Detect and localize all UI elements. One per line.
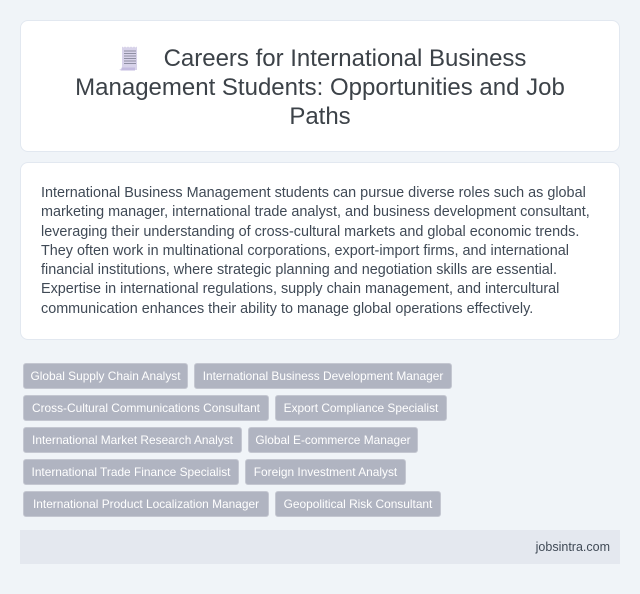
- tag: [194, 363, 452, 389]
- tag: [248, 427, 418, 453]
- tag: Cross-Cultural Communications Consultant: [32, 401, 260, 415]
- tag: International Business Development Manager: [203, 369, 443, 383]
- tag: Foreign Investment Analyst: [254, 465, 397, 479]
- tag: [23, 491, 269, 517]
- tag: Global E-commerce Manager: [255, 433, 411, 447]
- intro paragraph: International Business Management students can pursue diverse roles such as global marketing manager, international trade analyst, and business development consultant, leveraging their understanding of cross-cultural markets and global economic trends. They often work in multinational corporations, export-import firms, and international financial institutions, where strategic planning and negotiation skills are essential. Expertise in international regulations, supply chain management, and intercultural communication enhances their ability to manage global operations effectively.: [41, 185, 590, 316]
- tag: [23, 395, 269, 421]
- header panel: [20, 20, 620, 152]
- tag: [275, 395, 447, 421]
- intro text panel: [20, 162, 620, 340]
- tag: International Product Localization Manager: [33, 497, 259, 511]
- tag: International Trade Finance Specialist: [32, 465, 230, 479]
- tag: [23, 459, 239, 485]
- tag: [23, 363, 188, 389]
- tag: [23, 427, 242, 453]
- tag: [275, 491, 441, 517]
- tag: [245, 459, 406, 485]
- tag: International Market Research Analyst: [32, 433, 233, 447]
- tag: Global Supply Chain Analyst: [30, 369, 181, 383]
- footer bar: [20, 530, 620, 564]
- footer source: jobsintra.com: [536, 540, 610, 554]
- title: Careers for International Business Management Students: Opportunities and Job Paths: [75, 45, 565, 130]
- tag: Export Compliance Specialist: [284, 401, 438, 415]
- tag: Geopolitical Risk Consultant: [284, 497, 432, 511]
